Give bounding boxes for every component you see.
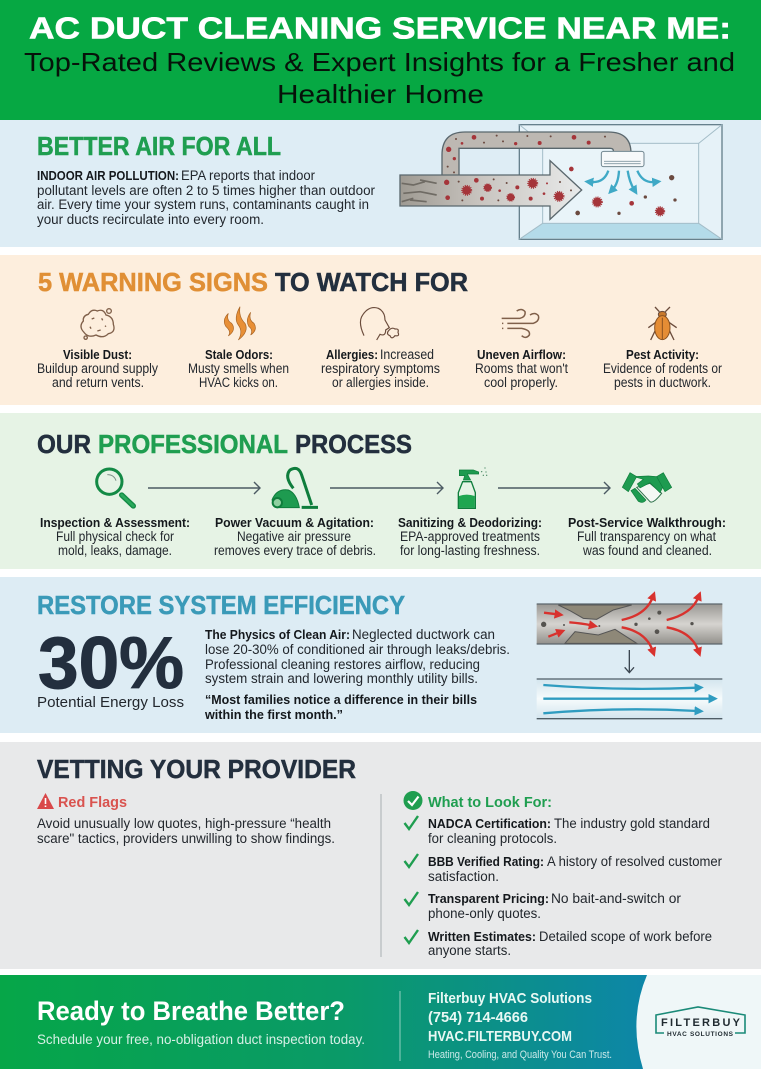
item: estimates: anyone starts.	[428, 943, 511, 958]
contact details: Heating, Cooling, and Quality You Can Trust.	[428, 1049, 612, 1061]
header banner	[0, 0, 761, 120]
sign: visible dust: Visible Dust:	[63, 347, 132, 362]
icon: vacuum cleaner	[272, 468, 318, 508]
step: inspection: Inspection & Assessment:	[40, 515, 190, 530]
red flags text	[37, 816, 335, 846]
sign: uneven airflow	[475, 347, 568, 390]
item: pricing: Transparent Pricing:	[428, 891, 549, 906]
text block: physics of clean air	[205, 627, 510, 686]
red flags heading: Red Flags	[58, 794, 127, 811]
footer divider	[399, 991, 401, 1061]
sign: visible dust: Buildup around supply	[37, 361, 158, 376]
icon: green check circle	[404, 791, 422, 810]
sign: allergies	[321, 347, 440, 390]
quote	[204, 692, 477, 722]
step: sanitizing: Sanitizing & Deodorizing:	[398, 515, 542, 530]
what to look for heading: What to Look For:	[428, 794, 552, 811]
contact details: (754) 714-4666	[428, 1009, 528, 1026]
sign: stale odors: Stale Odors:	[205, 347, 273, 362]
item: pricing: No bait-and-switch or	[551, 891, 682, 906]
sign: pest activity: Evidence of rodents or	[603, 361, 722, 376]
icon: handshake	[622, 473, 672, 502]
illustration: contaminated duct into room	[400, 125, 722, 239]
step: sanitizing	[398, 515, 542, 558]
step: walkthrough	[568, 515, 726, 558]
icon: dust cloud	[81, 309, 114, 339]
text block: physics of clean air: system strain and lowering monthly utility bills.	[205, 671, 478, 686]
arrow: step 2 to 3	[330, 482, 443, 494]
step: walkthrough: Post-Service Walkthrough:	[568, 515, 726, 530]
sign: stale odors	[188, 347, 289, 390]
footer banner	[0, 975, 761, 1069]
sign: pest activity: Pest Activity:	[626, 347, 699, 362]
sign: allergies: respiratory symptoms	[321, 361, 440, 376]
logo background	[636, 975, 761, 1069]
sign: stale odors: HVAC kicks on.	[199, 375, 278, 390]
text block: indoor air pollution: your ducts recirculate into every room.	[37, 212, 264, 227]
step: power vacuum: Negative air pressure	[237, 529, 351, 544]
sign: stale odors: Musty smells when	[188, 361, 289, 376]
panel: warning signs	[0, 255, 761, 405]
arrow: step 3 to 4	[498, 482, 610, 494]
heading: professional process: OUR	[37, 429, 91, 459]
text block: indoor air pollution	[37, 168, 376, 227]
icon: magnifying glass	[97, 469, 133, 506]
text block: physics of clean air: lose 20-30% of conditioned air through leaks/debris.	[205, 642, 510, 657]
illustration: clogged versus clean duct	[537, 597, 722, 719]
text block: physics of clean air: The Physics of Clean Air:	[205, 627, 350, 642]
sign: allergies: or allergies inside.	[332, 375, 429, 390]
item: NADCA: The industry gold standard	[554, 816, 710, 831]
sign: uneven airflow: cool properly.	[484, 375, 558, 390]
item: BBB: satisfaction.	[428, 869, 499, 884]
step: inspection: Full physical check for	[56, 529, 174, 544]
item: estimates: Detailed scope of work before	[539, 929, 712, 944]
heading: professional process: PROFESSIONAL	[98, 429, 288, 459]
icon: uneven airflow wind	[502, 309, 539, 337]
stat label: Potential Energy Loss	[37, 694, 184, 711]
item: NADCA: NADCA Certification:	[428, 816, 551, 831]
step: sanitizing: for long-lasting freshness.	[400, 543, 540, 558]
step: power vacuum: removes every trace of debris.	[214, 543, 376, 558]
icon: warning triangle	[37, 793, 54, 809]
item: BBB: BBB Verified Rating:	[428, 854, 544, 869]
sign: uneven airflow: Uneven Airflow:	[477, 347, 566, 362]
sign: visible dust	[37, 347, 158, 390]
subtitle: Top-Rated Reviews & Expert Insights for a Fresher and	[24, 47, 735, 77]
divider	[380, 794, 382, 957]
text block: indoor air pollution: INDOOR AIR POLLUTION:	[37, 168, 179, 183]
contact details	[428, 990, 612, 1061]
sign: pest activity: pests in ductwork.	[614, 375, 711, 390]
item: estimates	[404, 929, 712, 958]
text block: indoor air pollution: pollutant levels are often 2 to 5 times higher than outdoor	[37, 183, 376, 198]
item: pricing: phone-only quotes.	[428, 906, 541, 921]
icon: coughing face	[360, 308, 399, 340]
step: inspection	[40, 515, 190, 558]
logo: filterbuy	[656, 1007, 745, 1038]
text block: physics of clean air: Neglected ductwork can	[352, 627, 495, 642]
step: walkthrough: Full transparency on what	[577, 529, 716, 544]
call to action text: Schedule your free, no-obligation duct inspection today.	[37, 1032, 365, 1047]
step: walkthrough: was found and cleaned.	[582, 543, 712, 558]
panel: vetting your provider	[0, 742, 761, 969]
contact details: Filterbuy HVAC Solutions	[428, 990, 592, 1007]
stat: 30 percent: 30%	[38, 623, 184, 704]
subtitle: Healthier Home	[277, 79, 484, 109]
item: BBB	[404, 854, 723, 884]
icon: stale odor waves	[224, 307, 255, 340]
icon: spray bottle	[458, 467, 487, 508]
panel: professional process	[0, 413, 761, 569]
title: AC DUCT CLEANING SERVICE NEAR ME:	[29, 10, 731, 46]
item: NADCA: for cleaning protocols.	[428, 831, 557, 846]
item: pricing	[404, 891, 682, 921]
heading: restore system efficiency: RESTORE SYSTEM EFFICIENCY	[37, 590, 405, 620]
step: sanitizing: EPA-approved treatments	[400, 529, 540, 544]
heading: professional process	[37, 429, 412, 459]
step: inspection: mold, leaks, damage.	[58, 543, 172, 558]
quote: “Most families notice a difference in their bills	[205, 692, 477, 707]
heading: professional process: PROCESS	[295, 429, 412, 459]
sign: allergies: Increased	[380, 347, 434, 362]
sign: visible dust: and return vents.	[52, 375, 144, 390]
sign: allergies: Allergies:	[326, 347, 378, 362]
item: NADCA	[404, 816, 710, 846]
step: power vacuum: Power Vacuum & Agitation:	[215, 515, 374, 530]
contact details: HVAC.FILTERBUY.COM	[428, 1028, 572, 1045]
heading: vetting your provider: VETTING YOUR PROVIDER	[37, 754, 356, 784]
heading: better air for all: BETTER AIR FOR ALL	[37, 131, 281, 161]
panel: better air for all	[0, 120, 761, 247]
icon: pest beetle	[648, 307, 677, 340]
logo: filterbuy: HVAC SOLUTIONS	[667, 1031, 734, 1038]
logo: filterbuy: FILTERBUY	[661, 1017, 741, 1029]
sign: uneven airflow: Rooms that won't	[475, 361, 568, 376]
item: BBB: A history of resolved customer	[547, 854, 723, 869]
subtitle	[24, 47, 735, 109]
heading: warning signs: TO WATCH FOR	[275, 267, 468, 297]
quote: within the first month.”	[204, 707, 343, 722]
text block: indoor air pollution: EPA reports that indoor	[181, 168, 316, 183]
text block: physics of clean air: Professional cleaning restores airflow, reducing	[205, 657, 480, 672]
red flags text: scare" tactics, providers unwilling to show findings.	[37, 831, 335, 846]
panel: restore system efficiency	[0, 577, 761, 733]
step: power vacuum	[214, 515, 376, 558]
arrow: step 1 to 2	[148, 482, 260, 494]
call to action heading: Ready to Breathe Better?	[37, 996, 345, 1026]
heading: warning signs: 5 WARNING SIGNS	[38, 267, 268, 297]
text block: indoor air pollution: air. Every time your system runs, contaminants caught in	[37, 197, 369, 212]
heading: warning signs	[38, 267, 468, 297]
item: estimates: Written Estimates:	[428, 929, 536, 944]
red flags text: Avoid unusually low quotes, high-pressure “health	[37, 816, 331, 831]
sign: pest activity	[603, 347, 722, 390]
